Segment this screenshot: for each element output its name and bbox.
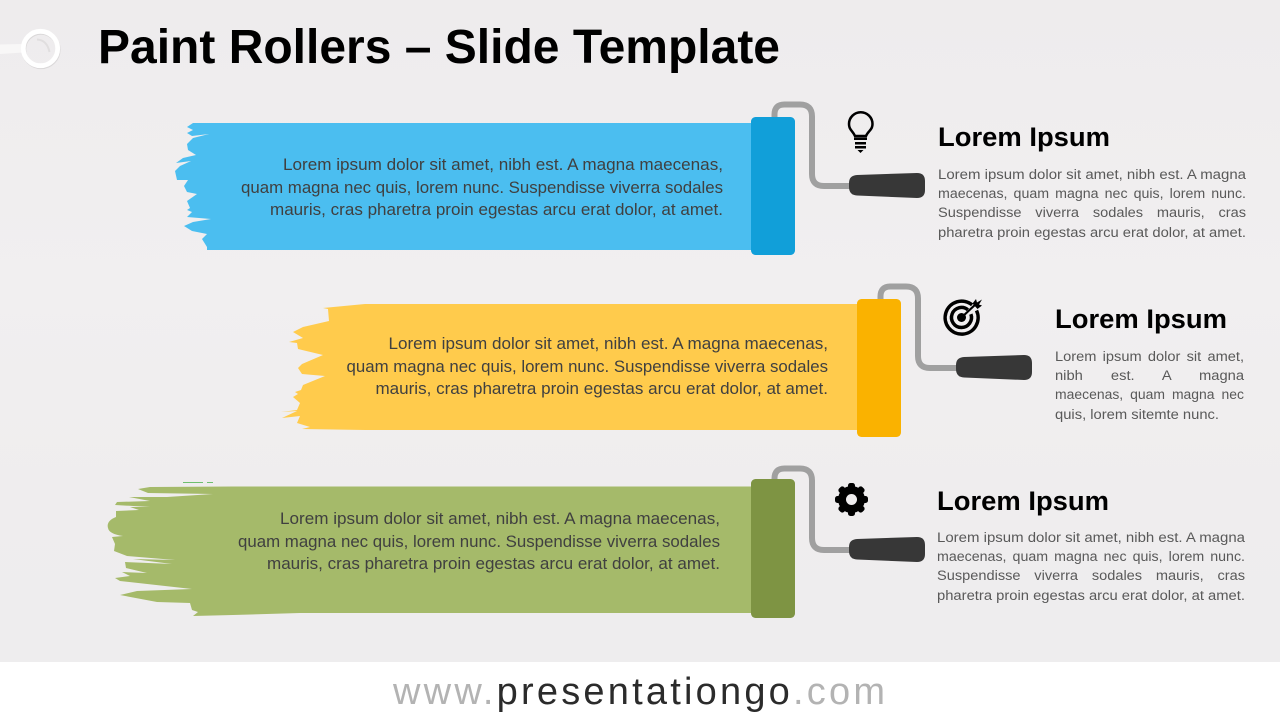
panel: yellow paint roller — [281, 286, 1032, 437]
yellow roller cylinder — [857, 299, 901, 437]
yellow brush text: Lorem ipsum dolor sit amet, nibh est. A magna maecenas, — [388, 335, 828, 353]
text block: third lorem ipsum: Suspendisse viverra sodales mauris, cras — [937, 568, 1245, 583]
footer website address: www.presentationgo.com — [392, 671, 885, 713]
panel: blue paint roller — [175, 104, 925, 255]
title: Paint Rollers – Slide Template — [98, 21, 780, 74]
blue roller handle — [774, 104, 852, 186]
icon: light bulb — [849, 112, 872, 153]
text block: third lorem ipsum — [937, 486, 1246, 603]
yellow roller handle — [880, 286, 958, 368]
green brush fleck — [183, 482, 213, 484]
text block: first lorem ipsum: Lorem Ipsum — [938, 122, 1110, 152]
green roller cylinder — [751, 479, 795, 618]
text block: third lorem ipsum: Lorem Ipsum — [937, 486, 1109, 516]
text block: first lorem ipsum: Suspendisse viverra sodales mauris, cras — [938, 205, 1246, 220]
icon: target with arrow — [945, 299, 982, 334]
text block: first lorem ipsum — [938, 122, 1247, 240]
icon: gear — [835, 483, 868, 516]
yellow brush text: quam magna nec quis, lorem nunc. Suspendisse viverra sodales — [346, 358, 828, 376]
green brush stroke — [108, 486, 751, 616]
blue brush stroke — [175, 123, 751, 250]
green roller handle — [774, 468, 852, 550]
blue brush text: Lorem ipsum dolor sit amet, nibh est. A magna maecenas, — [283, 156, 723, 174]
yellow brush stroke — [281, 304, 857, 430]
text block: first lorem ipsum: pharetra proin egestas arcu erat dolor, at amet. — [938, 225, 1246, 240]
yellow brush text — [346, 335, 828, 398]
logo: paint roller ring — [0, 31, 58, 67]
green brush text — [238, 510, 720, 573]
green brush text: quam magna nec quis, lorem nunc. Suspendisse viverra sodales — [238, 533, 720, 551]
panel: green paint roller — [108, 468, 925, 618]
text block: third lorem ipsum: maecenas, quam magna nec quis, lorem nunc. — [937, 549, 1245, 564]
footer band — [0, 662, 1280, 720]
text block: third lorem ipsum: pharetra proin egestas arcu erat dolor, at amet. — [937, 588, 1245, 603]
blue brush text: quam magna nec quis, lorem nunc. Suspendisse viverra sodales — [241, 179, 723, 197]
yellow roller grip — [956, 355, 1032, 380]
text block: third lorem ipsum: Lorem ipsum dolor sit amet, nibh est. A magna — [937, 530, 1246, 545]
text block: second lorem ipsum: maecenas, quam magna nec — [1055, 387, 1244, 402]
blue roller grip — [849, 173, 925, 198]
text block: first lorem ipsum: Lorem ipsum dolor sit amet, nibh est. A magna — [938, 167, 1247, 182]
blue roller cylinder — [751, 117, 795, 255]
text block: second lorem ipsum: nibh est. A magna — [1055, 368, 1245, 383]
yellow brush text: mauris, cras pharetra proin egestas arcu erat dolor, at amet. — [376, 380, 828, 398]
green brush text: Lorem ipsum dolor sit amet, nibh est. A magna maecenas, — [280, 510, 720, 528]
text block: second lorem ipsum: Lorem ipsum dolor sit amet, — [1055, 349, 1244, 364]
text block: first lorem ipsum: maecenas, quam magna nec quis, lorem nunc. — [938, 186, 1246, 201]
green roller grip — [849, 537, 925, 562]
blue brush text — [241, 156, 723, 219]
text block: second lorem ipsum — [1055, 304, 1245, 422]
blue brush text: mauris, cras pharetra proin egestas arcu erat dolor, at amet. — [270, 201, 723, 219]
green brush text: mauris, cras pharetra proin egestas arcu erat dolor, at amet. — [267, 555, 720, 573]
text block: second lorem ipsum: Lorem Ipsum — [1055, 304, 1227, 334]
text block: second lorem ipsum: quis, lorem sitemte nunc. — [1055, 407, 1219, 422]
